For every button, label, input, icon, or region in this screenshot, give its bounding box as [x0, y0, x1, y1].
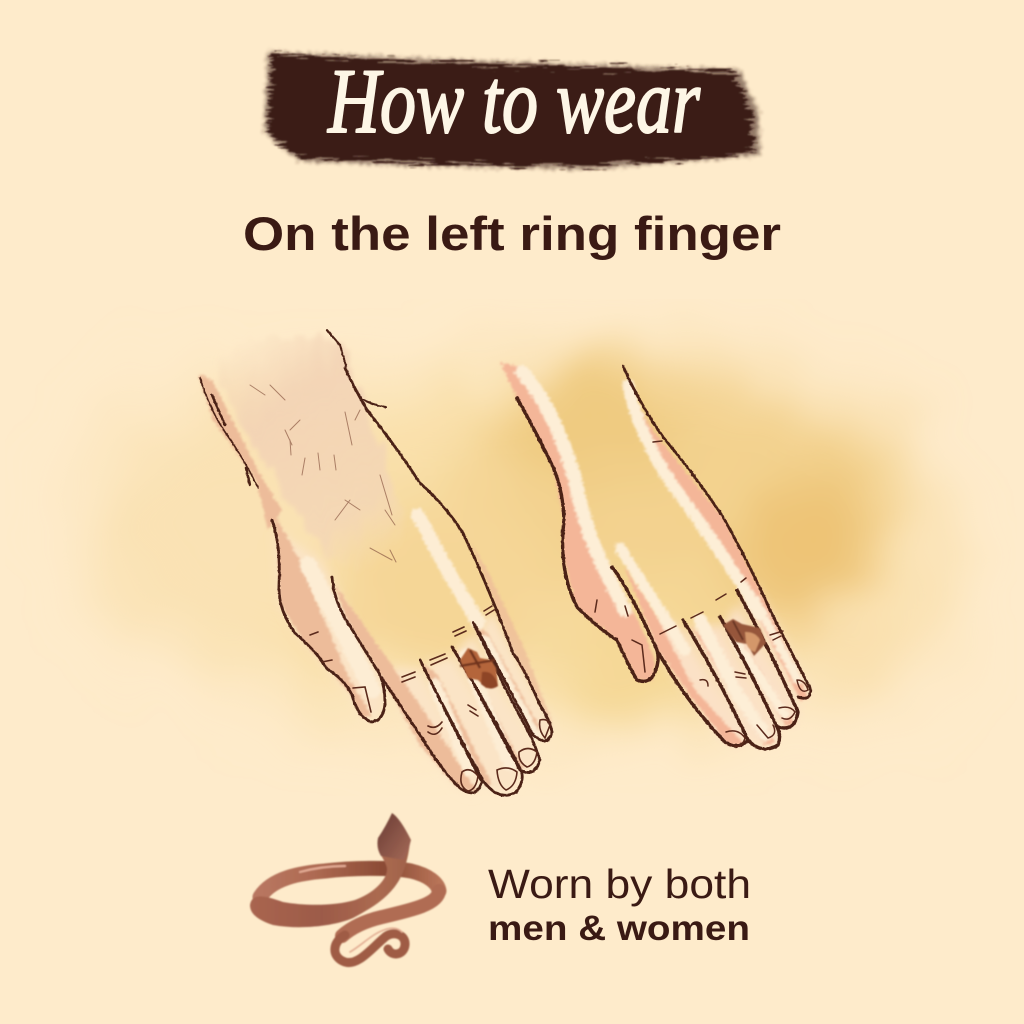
left hand peach shading [198, 374, 553, 792]
watercolor background wash [90, 370, 940, 725]
heading banner: How to wear [264, 50, 760, 169]
snake tail spiral [335, 934, 405, 963]
left hand finger base fill [275, 530, 553, 795]
left hand outline [200, 330, 552, 795]
caption line one: Worn by both [488, 861, 751, 907]
banner title: How to wear [327, 50, 701, 152]
right hand finger base fill [645, 585, 810, 748]
caption: worn by both men & women [488, 861, 751, 948]
right hand illustration [500, 362, 810, 749]
left hand highlights [308, 515, 535, 770]
right hand highlights [522, 372, 798, 735]
ring front snake body [250, 842, 410, 927]
brush stroke feather [264, 52, 760, 169]
ring on right hand [723, 619, 766, 656]
left hand sketch marks [250, 385, 396, 562]
left hand knuckles and nails [310, 606, 550, 791]
ring back band [260, 868, 439, 897]
right hand dashes and nails [595, 441, 808, 746]
right hand peach shading [500, 362, 808, 745]
brush stroke [268, 54, 752, 166]
snake head [377, 813, 411, 860]
right hand outline [517, 366, 810, 749]
ring band highlight [300, 866, 345, 872]
caption line two: men & women [488, 909, 750, 948]
ring right band [342, 891, 439, 936]
left hand forearm pale streaks [205, 335, 405, 570]
tail highlight [350, 928, 402, 952]
left hand illustration [198, 330, 553, 795]
ring on left hand [460, 648, 498, 689]
copper snake ring photo [250, 813, 439, 963]
subheading: On the left ring finger [243, 207, 781, 260]
